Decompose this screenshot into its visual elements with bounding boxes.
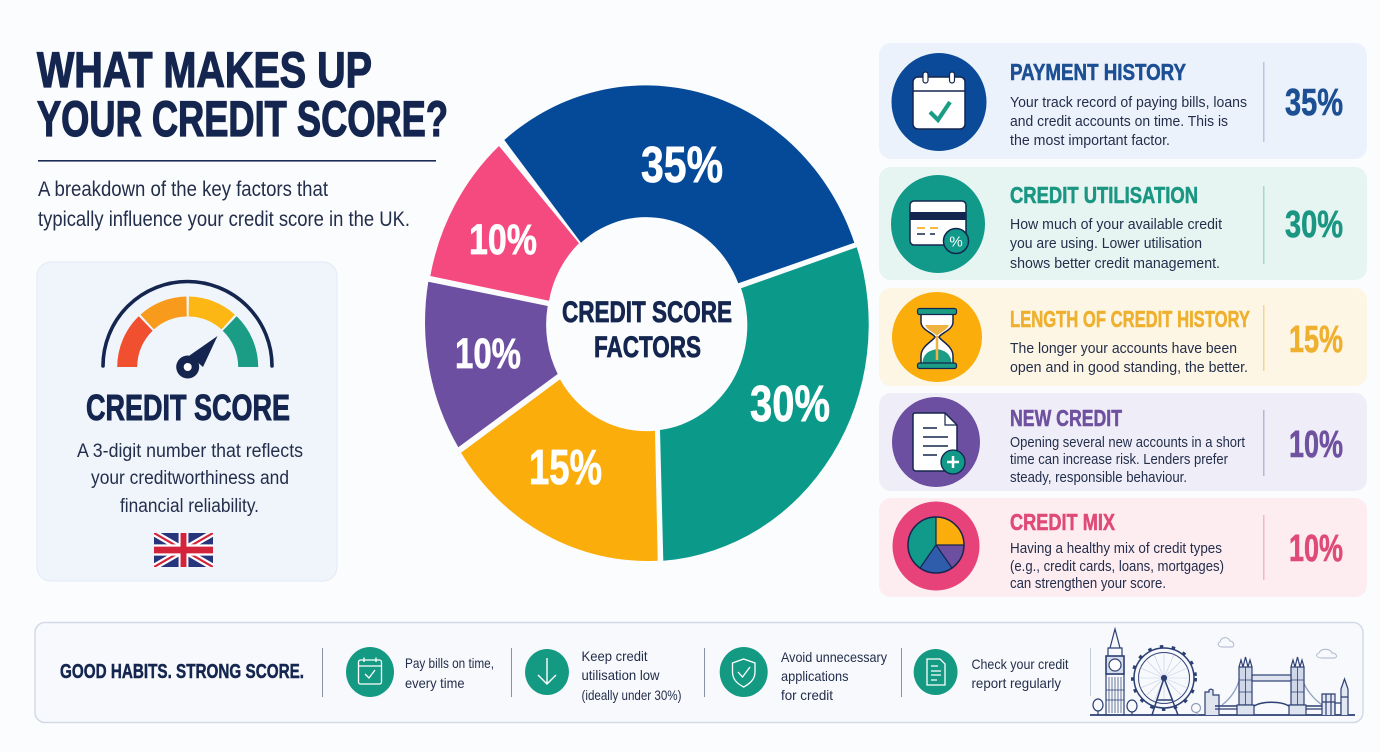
icon: calendar xyxy=(346,647,394,697)
panel: length of credit history xyxy=(879,288,1367,386)
description: shows better credit management. xyxy=(1010,255,1220,272)
panel: credit utilisation xyxy=(879,167,1367,280)
segment: new credit 10% xyxy=(425,282,558,447)
text: applications xyxy=(781,668,848,684)
habit: check report xyxy=(914,649,1069,695)
description: and credit accounts on time. This is xyxy=(1010,113,1228,130)
text: credit score description: A 3-digit number that reflects xyxy=(77,441,303,462)
heading: credit score: CREDIT SCORE xyxy=(86,387,290,428)
habit: avoid applications xyxy=(720,647,887,703)
title xyxy=(37,42,448,147)
heading: CREDIT UTILISATION xyxy=(1010,182,1198,208)
panel: credit mix xyxy=(879,498,1367,597)
description: Opening several new accounts in a short xyxy=(1010,434,1246,451)
icon: document with plus xyxy=(892,397,980,487)
heading: LENGTH OF CREDIT HISTORY xyxy=(1010,306,1250,332)
illustration: London skyline xyxy=(1090,629,1355,715)
icon: pie chart xyxy=(892,502,980,590)
segment: payment history 35% xyxy=(504,85,854,283)
percentage: 30% xyxy=(1285,204,1343,246)
description: open and in good standing, the better. xyxy=(1010,359,1248,376)
percentage labels: 10% xyxy=(455,330,521,378)
text: credit score description xyxy=(77,441,303,517)
subtitle: A breakdown of the key factors that xyxy=(38,178,328,201)
percentage: 10% xyxy=(1289,424,1343,466)
description: you are using. Lower utilisation xyxy=(1010,235,1202,252)
text: credit score description: financial reliability. xyxy=(120,496,259,517)
percentage labels: 15% xyxy=(529,441,602,495)
percentage labels: 30% xyxy=(750,375,830,432)
icon: shield xyxy=(720,647,768,697)
text xyxy=(582,648,682,703)
text: every time xyxy=(405,675,465,691)
panel: new credit xyxy=(879,393,1367,491)
habit: pay bills xyxy=(346,647,494,697)
icon: credit card: % xyxy=(949,234,963,250)
text: Keep credit xyxy=(582,648,648,664)
text xyxy=(781,649,887,703)
text xyxy=(972,656,1069,691)
description: time can increase risk. Lenders prefer xyxy=(1010,451,1228,468)
segment: length of history 15% xyxy=(461,379,658,561)
description: (e.g., credit cards, loans, mortgages) xyxy=(1010,558,1224,575)
centre label: FACTORS xyxy=(594,331,701,364)
text: credit score description: your creditworthiness and xyxy=(91,468,289,489)
segment: credit utilisation 30% xyxy=(660,247,869,561)
title: YOUR CREDIT SCORE? xyxy=(37,91,448,147)
text: (ideally under 30%) xyxy=(582,687,682,703)
heading: PAYMENT HISTORY xyxy=(1010,59,1186,85)
description xyxy=(1010,216,1223,272)
icon: calendar xyxy=(892,53,986,151)
percentage: 35% xyxy=(1285,82,1343,124)
icon: report document xyxy=(914,649,958,695)
icon: credit score gauge xyxy=(103,282,272,378)
heading: CREDIT MIX xyxy=(1010,509,1116,535)
subtitle: typically influence your credit score in the UK. xyxy=(38,208,410,231)
centre label xyxy=(562,296,732,364)
centre label: CREDIT SCORE xyxy=(562,296,732,329)
text: Pay bills on time, xyxy=(405,655,494,671)
chart: credit score factors donut xyxy=(425,85,869,561)
percentage labels: 35% xyxy=(641,136,723,193)
text: report regularly xyxy=(972,675,1061,691)
percentage: 15% xyxy=(1289,319,1343,361)
description xyxy=(1010,94,1247,149)
icon: credit card xyxy=(891,175,985,273)
description: Having a healthy mix of credit types xyxy=(1010,540,1222,557)
habit: keep utilisation low xyxy=(525,648,682,703)
text xyxy=(405,655,494,691)
description xyxy=(1010,340,1248,376)
percentage labels: 10% xyxy=(469,216,537,264)
text: Check your credit xyxy=(972,656,1069,672)
segment: credit mix 10% xyxy=(430,146,579,301)
heading: NEW CREDIT xyxy=(1010,405,1122,431)
percentage labels xyxy=(455,136,830,495)
text: for credit xyxy=(781,687,833,703)
description xyxy=(1010,434,1246,486)
description: steady, responsible behaviour. xyxy=(1010,469,1187,486)
description: can strengthen your score. xyxy=(1010,575,1166,592)
icon: down arrow xyxy=(525,649,569,695)
icon: UK flag xyxy=(154,533,213,567)
subtitle xyxy=(38,178,410,231)
description xyxy=(1010,540,1224,592)
description: How much of your available credit xyxy=(1010,216,1223,233)
icon: hourglass xyxy=(892,292,982,382)
percentage: 10% xyxy=(1289,528,1343,570)
text: Avoid unnecessary xyxy=(781,649,887,665)
heading: good habits: GOOD HABITS. STRONG SCORE. xyxy=(60,660,304,683)
description: the most important factor. xyxy=(1010,132,1170,149)
description: Your track record of paying bills, loans xyxy=(1010,94,1247,111)
panel: good habits band xyxy=(35,622,1363,722)
title: WHAT MAKES UP xyxy=(37,42,372,98)
panel: credit score explainer xyxy=(37,262,337,581)
description: The longer your accounts have been xyxy=(1010,340,1237,357)
text: utilisation low xyxy=(582,667,660,683)
panel: payment history xyxy=(879,43,1367,159)
